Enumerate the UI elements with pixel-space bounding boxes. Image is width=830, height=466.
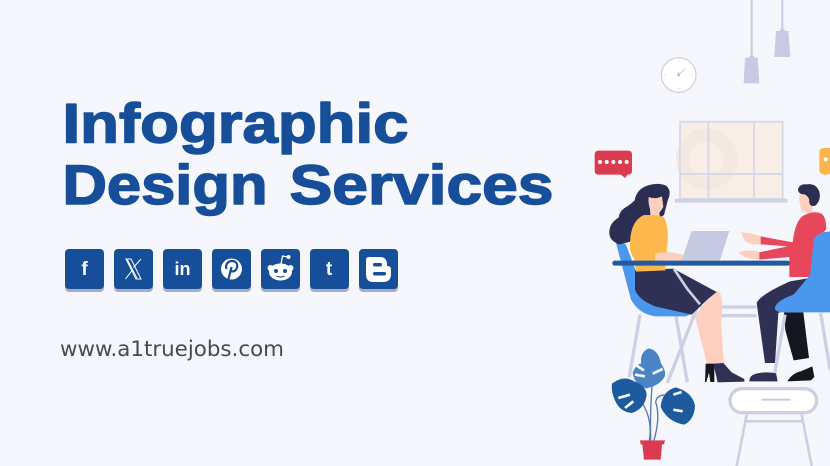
title: Infographic [62, 92, 408, 154]
woman's leg [695, 291, 724, 364]
illustration: office meeting [595, 0, 830, 466]
leaf: top [633, 348, 665, 388]
man's chair back [793, 232, 830, 295]
laptop [682, 231, 729, 260]
leaf: left [612, 379, 647, 413]
icon: linkedin: in [174, 259, 190, 279]
window [675, 122, 787, 203]
social icons row [65, 249, 398, 292]
icon: tumblr [310, 249, 349, 292]
man's chair legs [773, 313, 830, 381]
table and woman's chair legs [629, 305, 757, 383]
icon: reddit [261, 249, 300, 292]
man's front leg [757, 278, 810, 363]
icon: pinterest [212, 249, 251, 292]
man's chair [775, 233, 830, 312]
title: Design [62, 153, 268, 216]
man: hands [738, 232, 761, 259]
man: head [799, 191, 813, 214]
woman: face and neck [648, 196, 663, 219]
lower room: table, chairs, figures, plant, stool [612, 233, 830, 466]
woman's skirt [635, 269, 717, 315]
speech bubble: orange [819, 148, 830, 175]
woman: torso [630, 215, 668, 272]
woman: hand [655, 252, 683, 261]
stool [730, 389, 817, 466]
title: Services [290, 153, 554, 216]
leaf veins [618, 366, 683, 411]
plant stems [643, 384, 667, 440]
woman's strap [674, 269, 700, 304]
icon: X [114, 249, 153, 292]
woman: hair [609, 184, 670, 244]
speech bubble: red [595, 151, 632, 178]
woman's shoes [705, 363, 744, 382]
icon: tumblr: t [326, 259, 333, 280]
website url: www.a1truejobs.com [60, 337, 284, 361]
icon: linkedin [163, 249, 202, 292]
plant pot [640, 440, 665, 460]
icon: blogger [359, 249, 398, 292]
man's back leg [784, 312, 809, 360]
leaf: right [661, 387, 695, 425]
figures upper bodies at the table [609, 184, 830, 295]
table top [612, 261, 790, 266]
icon: facebook [65, 249, 104, 292]
title [62, 92, 554, 216]
man's shoes [749, 366, 814, 381]
icon: facebook: f [81, 259, 88, 280]
icon: wall clock [661, 58, 696, 92]
man: torso and arms [759, 212, 826, 277]
man: hair [798, 184, 820, 206]
woman's chair [616, 241, 693, 316]
plant [612, 348, 695, 460]
upper room: lamps, clock, window, speech bubbles [595, 0, 830, 203]
icon: hanging lamps [744, 0, 790, 83]
